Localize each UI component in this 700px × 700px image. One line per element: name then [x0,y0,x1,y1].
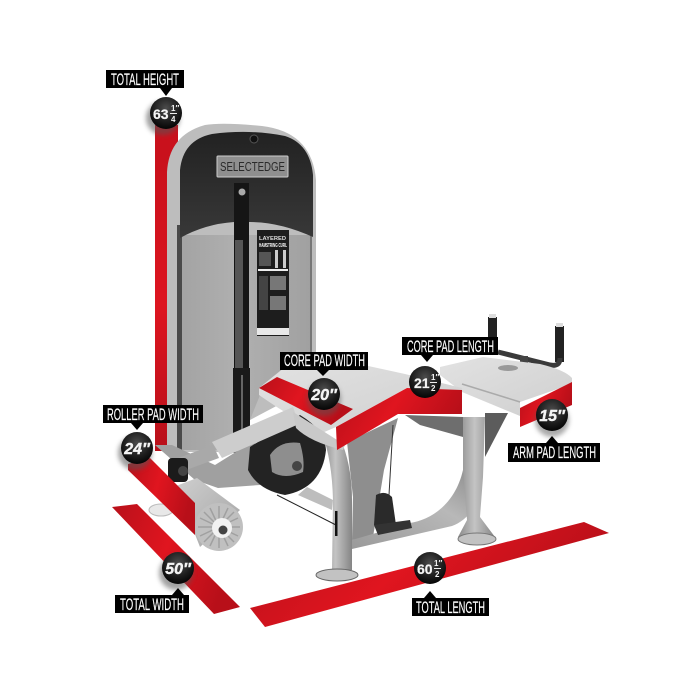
roller pad [176,478,243,551]
badge: 63 1/4 [146,97,182,135]
total length floor strip [250,522,609,627]
black marker on leg [335,511,338,536]
underside of arm pad support [405,415,463,437]
label: roller pad width: ROLLER PAD WIDTH [107,406,199,424]
badge: 24 inches [118,432,153,470]
label: total height: TOTAL HEIGHT [111,71,179,89]
badge: 21 1/2: 21 [414,375,430,391]
roller pad red strip [128,458,195,535]
label: core pad width [280,352,368,376]
center web plate [347,418,398,540]
machine: arm pad [440,357,572,416]
total width floor strip [112,504,240,614]
badge: 60 1/2: 1″ [434,559,442,568]
machine: leg extension arm and cam [155,407,345,536]
brand plate [217,156,288,177]
label: arm pad length: ARM PAD LENGTH [513,444,596,462]
cam pivot cover [293,412,345,450]
badge: 20 inches [307,378,341,416]
badge: 24 inches: 24″ [123,441,151,458]
total height red bar [155,125,178,451]
instruction placard: LAYERED [259,236,286,242]
rear foot [458,533,496,545]
core pad length red strip [336,388,462,450]
small pulley [374,493,412,535]
arm pad length red strip [520,382,572,427]
label: core pad width: CORE PAD WIDTH [284,352,365,370]
thin arm tube [173,445,219,473]
machine: core pad [259,362,462,433]
machine: weight stack tower [167,124,316,453]
cable to leg [277,495,336,525]
badge: 21 1/2: 1″ [431,373,439,382]
black roller bracket [168,458,188,482]
selector pin column [233,368,250,453]
tower dark top cap [180,132,313,238]
main arm tube [212,407,299,458]
instruction placard [257,230,289,336]
central slot [234,183,249,383]
badge: 60 1/2 [414,552,446,584]
badge: 50 inches [159,552,194,590]
machine: handle bar [488,314,564,368]
badge: 63 1/4: 4 [171,115,176,124]
label: total length [412,591,489,617]
front leg [322,433,352,570]
arch and base rail [352,470,483,549]
badge: 15 inches [535,399,569,437]
tower outer frame [167,124,316,452]
rear leg [458,417,495,537]
label: roller pad width [103,405,203,430]
label: total length: TOTAL LENGTH [416,599,485,617]
strut [298,487,333,510]
cap bolt [250,135,258,143]
label: total width: TOTAL WIDTH [120,596,184,614]
badge: 60 1/2: 2 [435,570,440,579]
instruction placard: HAMSTRING CURL [259,243,287,249]
label: core pad length [402,337,498,362]
brand plate: SELECTEDGE [220,159,285,174]
badge: 15 inches: 15″ [539,408,566,425]
badge: 60 1/2: 60 [417,561,433,577]
label: arm pad length [508,436,600,462]
badge: 63 1/4: 63 [153,106,169,122]
front foot [316,569,358,581]
core pad width red strip [259,377,353,425]
dark cam wheel [248,415,326,495]
machine: rear bench frame [316,413,508,581]
badge: 20 inches: 20″ [310,387,338,404]
badge: 21 1/2 [409,366,441,398]
label: total width [115,588,189,614]
badge: 21 1/2: 2 [431,384,436,393]
label: core pad length: CORE PAD LENGTH [407,338,494,356]
tower grey panel [180,235,312,450]
badge: 50 inches: 50″ [165,561,192,578]
label: total height [106,70,184,96]
base plate under roller strip [128,470,195,535]
lower pivot structure [155,440,260,488]
badge: 63 1/4: 1″ [171,104,179,113]
vertical cable [389,425,393,495]
